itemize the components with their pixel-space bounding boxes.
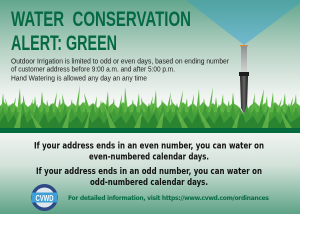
- icon: CVWD logo: CVWD: [36, 194, 54, 203]
- watering rules text: Outdoor Irrigation is limited to odd or even days, based on ending number: [11, 58, 230, 66]
- background: upper gradient: [0, 0, 300, 128]
- watering rules text: Hand Watering is allowed any day an any time: [11, 76, 147, 82]
- odd and even watering instructions: [34, 142, 264, 188]
- odd and even watering instructions: odd-numbered calendar days.: [90, 178, 208, 188]
- icon: CVWD logo: [31, 184, 58, 211]
- title: [11, 8, 191, 55]
- watering rules text: [11, 58, 230, 82]
- background: lower gradient panel: [0, 133, 300, 214]
- grass: [0, 85, 300, 128]
- icon: sprinkler head: [239, 45, 249, 114]
- footer link text: For detailed information, visit https://www.cvwd.com/ordinances: [68, 195, 269, 202]
- grass base band: [0, 128, 300, 133]
- title: WATER CONSERVATION: [11, 8, 191, 31]
- water spray cone: [186, 0, 300, 45]
- watering rules text: of customer address before 9:00 a.m. and after 5:00 p.m.: [11, 66, 175, 74]
- title: ALERT: GREEN: [11, 32, 117, 55]
- odd and even watering instructions: even-numbered calendar days.: [89, 152, 209, 162]
